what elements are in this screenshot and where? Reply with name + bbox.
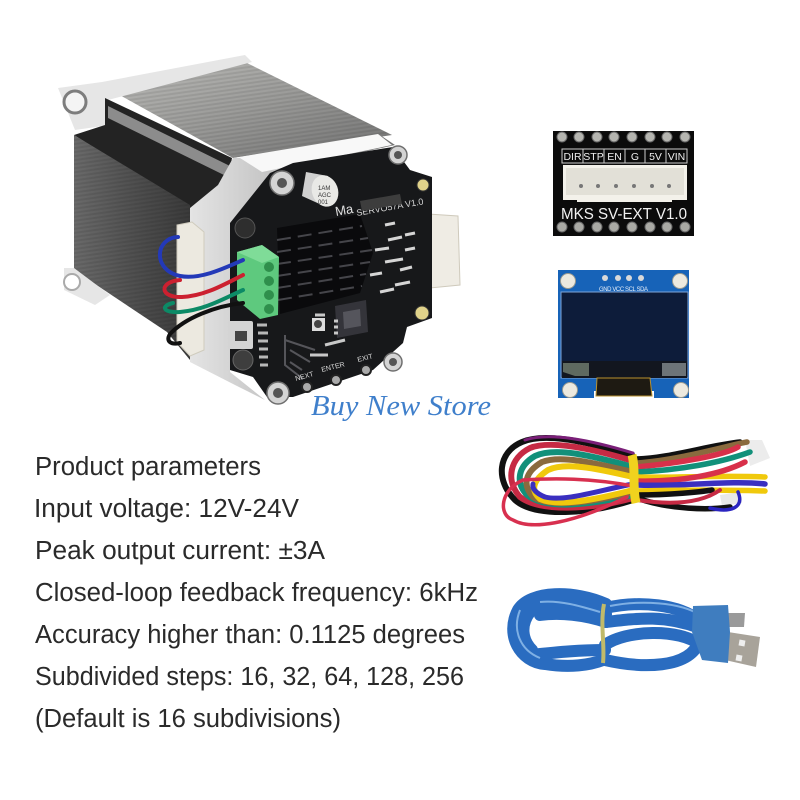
pin labels: GND VCC SCL SDA bbox=[599, 287, 648, 293]
pin labels: 5V bbox=[649, 151, 662, 163]
button labels: NEXT bbox=[295, 371, 315, 383]
product parameters text bbox=[34, 453, 478, 733]
yellow tie bbox=[632, 455, 636, 503]
accuracy: Accuracy higher than: 0.1125 degrees bbox=[35, 621, 465, 649]
header pins bbox=[602, 275, 644, 281]
green terminal block bbox=[237, 245, 279, 319]
stepper motor product photo: EXIT bbox=[357, 353, 374, 364]
pcb bbox=[558, 270, 689, 398]
peak current: Peak output current: ±3A bbox=[35, 537, 325, 565]
motor body top face bbox=[107, 62, 392, 158]
heatsink bbox=[277, 214, 373, 314]
usb plug metal bbox=[725, 632, 760, 667]
stepper motor product photo bbox=[58, 55, 460, 404]
left white connector bbox=[177, 222, 204, 356]
motor rear flange bbox=[58, 55, 252, 130]
pin labels bbox=[563, 151, 685, 163]
chip and components bbox=[228, 223, 415, 379]
motor groove bbox=[74, 98, 232, 210]
connector bbox=[745, 440, 770, 466]
pin label boxes bbox=[562, 149, 687, 163]
parameter heading: Product parameters bbox=[35, 453, 261, 481]
right side strands bbox=[637, 442, 765, 509]
motor wires bbox=[160, 237, 243, 344]
top pin holes bbox=[557, 132, 690, 142]
coloured wire bundle bbox=[502, 437, 770, 525]
blue loop bbox=[710, 492, 740, 510]
screen bbox=[561, 292, 688, 378]
stepper motor product photo: SERVO57A V1.0 bbox=[356, 196, 424, 218]
capacitor: 1AM bbox=[318, 186, 330, 192]
feedback frequency: Closed-loop feedback frequency: 6kHz bbox=[35, 579, 478, 607]
connector housings bbox=[692, 605, 730, 663]
screws bbox=[233, 146, 429, 404]
flange mount hole top bbox=[64, 91, 86, 113]
watermark: Buy New Store: Buy New Store bbox=[311, 391, 491, 422]
capacitor: AGC bbox=[318, 193, 332, 199]
OLED display module bbox=[558, 270, 689, 399]
subdivided steps: Subdivided steps: 16, 32, 64, 128, 256 bbox=[35, 663, 464, 691]
stepper motor product photo: ENTER bbox=[321, 361, 346, 374]
blue USB cable bbox=[513, 594, 760, 667]
capacitor bbox=[302, 172, 343, 210]
default subdivisions: (Default is 16 subdivisions) bbox=[35, 705, 341, 733]
capacitor: 001 bbox=[318, 200, 329, 206]
ribbon cable bbox=[596, 378, 652, 396]
module name: MKS SV-EXT V1.0 bbox=[561, 206, 687, 223]
pin labels: EN bbox=[607, 151, 622, 163]
pin labels: VIN bbox=[668, 151, 685, 163]
bottom pin holes bbox=[557, 222, 690, 232]
board buttons bbox=[302, 365, 371, 392]
micro USB port bbox=[228, 321, 253, 349]
micro plug metal bbox=[727, 613, 745, 627]
white connector bbox=[563, 165, 687, 203]
coiled cable bbox=[513, 594, 700, 666]
front end cap bbox=[190, 135, 395, 400]
motor side face bbox=[74, 135, 190, 360]
module board bbox=[553, 131, 694, 236]
pin labels: DIR bbox=[563, 151, 582, 163]
rubber band bbox=[602, 604, 604, 663]
input voltage: Input voltage: 12V-24V bbox=[34, 495, 299, 523]
pin labels: G bbox=[631, 151, 639, 163]
mount holes bbox=[560, 274, 688, 398]
right white connector bbox=[428, 214, 460, 288]
control board bbox=[230, 147, 432, 397]
MKS SV-EXT module bbox=[553, 131, 694, 236]
flange mount lower bbox=[64, 268, 110, 305]
header pins bbox=[360, 194, 402, 211]
left loop strands bbox=[502, 437, 633, 525]
board silkscreen label: Ma bbox=[334, 201, 355, 219]
pin labels: STP bbox=[583, 151, 604, 163]
